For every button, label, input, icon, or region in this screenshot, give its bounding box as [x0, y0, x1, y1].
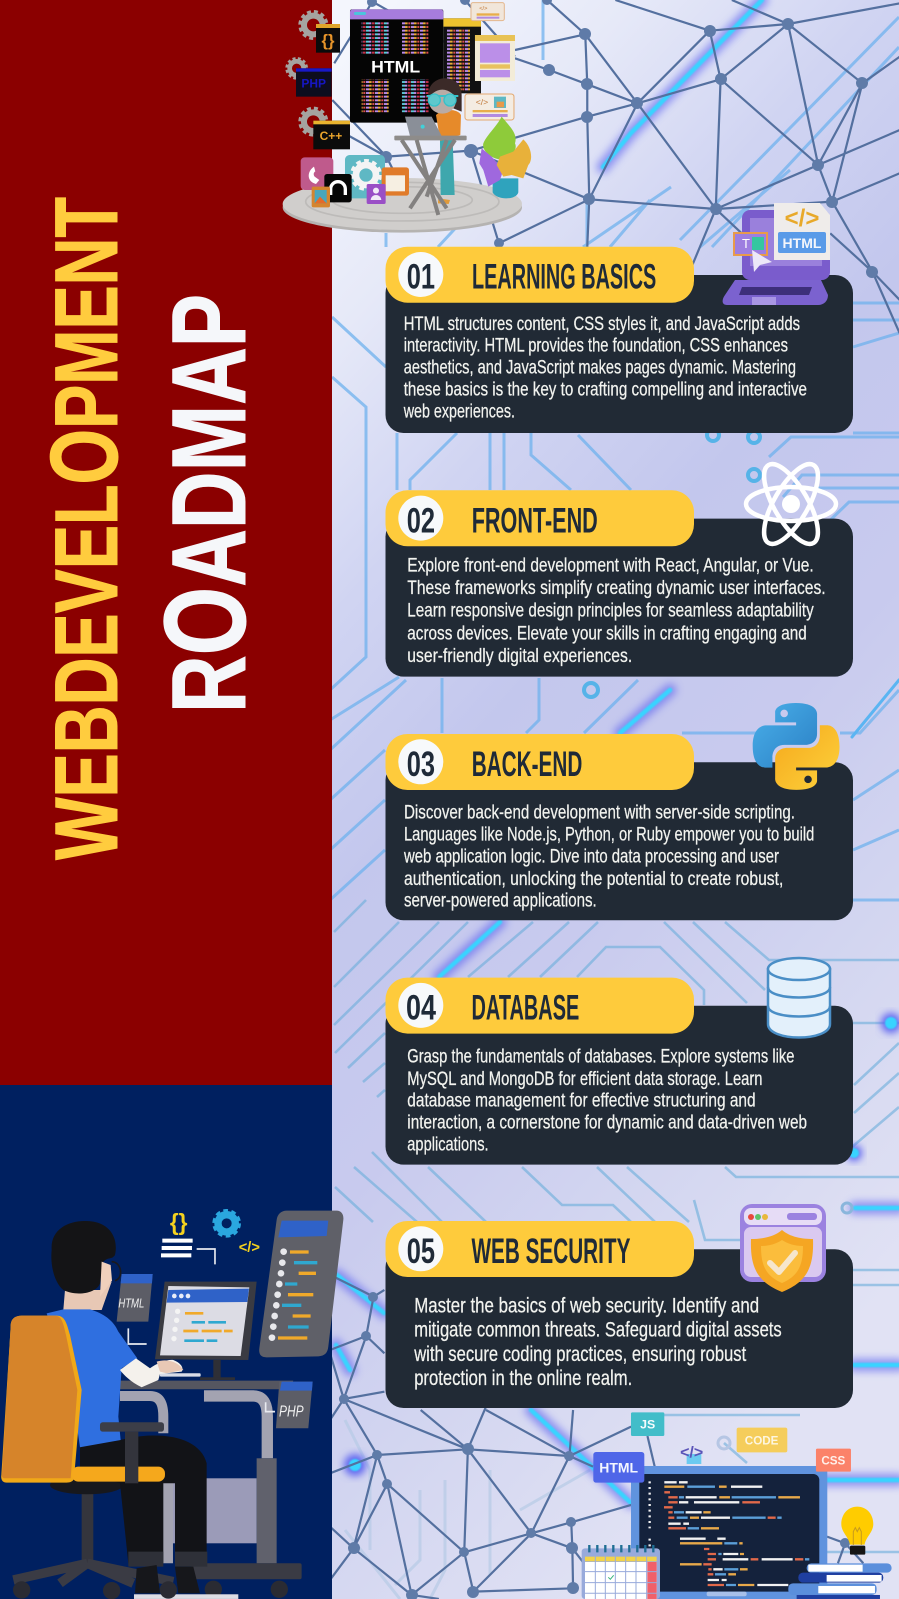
- body text: web application logic. Dive into data processing and user: [403, 847, 780, 868]
- main HTML panel: HTML: [371, 57, 420, 76]
- body text: web experiences.: [403, 401, 515, 422]
- body text: [403, 803, 814, 912]
- heading: WEB SECURITY: [472, 1232, 630, 1271]
- floating code symbols: {}: [170, 1209, 188, 1235]
- icon: html laptop: </>: [785, 205, 819, 232]
- plant: [479, 117, 531, 198]
- icon: database cylinder: [768, 958, 830, 1038]
- tile: PHP: [276, 1382, 313, 1428]
- icon: code brackets: </>: [680, 1444, 703, 1461]
- illustration: developer at standing desk with code panels: [283, 3, 531, 233]
- tile: PHP: PHP: [301, 77, 326, 91]
- body text: MySQL and MongoDB for efficient data storage. Learn: [407, 1069, 762, 1090]
- body text: [407, 556, 826, 667]
- chair: [1, 1316, 165, 1483]
- body text: mitigate common threats. Safeguard digital assets: [414, 1319, 782, 1342]
- side code panel: [443, 18, 481, 93]
- desk frame: [120, 1396, 302, 1599]
- desk and laptop: [394, 117, 467, 215]
- heading pill: [386, 978, 694, 1034]
- woman: [427, 78, 462, 204]
- icon: html laptop: [723, 203, 830, 305]
- card 2: front-end: [386, 490, 853, 677]
- body text: applications.: [407, 1135, 489, 1156]
- number badge: [398, 983, 443, 1028]
- body text: HTML structures content, CSS styles it, and JavaScript adds: [404, 314, 800, 335]
- chair base: [13, 1476, 177, 1599]
- body text: these basics is the key to crafting compelling and interactive: [404, 379, 807, 400]
- body text: [403, 314, 807, 422]
- tile: curly braces: {}: [322, 31, 335, 50]
- body text: interaction, a cornerstone for dynamic and data-driven web: [407, 1112, 807, 1133]
- card body: [386, 275, 853, 433]
- card 1: learning basics: [386, 247, 853, 433]
- tile: HTML: [117, 1274, 153, 1322]
- platter: [283, 178, 522, 233]
- title: roadmap: ROADMAP: [140, 294, 270, 713]
- glowing nodes and rings: [344, 429, 899, 1476]
- tag: CSS: CSS: [821, 1454, 846, 1467]
- tag: JS: JS: [640, 1418, 655, 1432]
- body text: Explore front-end development with React, Angular, or Vue.: [407, 556, 814, 577]
- icon: shield in browser window: [740, 1204, 826, 1292]
- icon: html laptop: T: [742, 236, 750, 251]
- neon streaks: [336, 0, 899, 1503]
- icon: books: [788, 1563, 892, 1599]
- monitor: [155, 1282, 257, 1380]
- small floating cards: </>: [476, 97, 488, 107]
- heading: FRONT-END: [472, 501, 598, 540]
- tile: curly braces: [316, 24, 340, 53]
- heading pill: [386, 734, 694, 790]
- tag: CODE: [737, 1428, 787, 1452]
- card body: [386, 762, 853, 920]
- card body: [386, 1006, 853, 1165]
- panel: red title panel: [0, 0, 332, 1085]
- body text: Grasp the fundamentals of databases. Explore systems like: [407, 1046, 794, 1067]
- number: 05: [407, 1232, 435, 1271]
- tag: CODE: CODE: [745, 1434, 779, 1447]
- faint traces, bottom left: [345, 1420, 590, 1599]
- floating code symbols: [128, 1209, 275, 1412]
- icon: react atom: [746, 457, 836, 551]
- body text: Master the basics of web security. Identify and: [414, 1294, 759, 1317]
- panel: navy illustration panel: [0, 1085, 332, 1599]
- number: 03: [407, 745, 435, 784]
- title: web development: WEBDEVELOPMENT: [31, 197, 138, 860]
- tag: HTML: [593, 1452, 644, 1483]
- small floating cards: [465, 3, 515, 120]
- number badge: [398, 496, 443, 541]
- body text: authentication, unlocking the potential to create robust,: [404, 869, 783, 890]
- tag: JS: [631, 1412, 664, 1436]
- number badge: [398, 1226, 443, 1271]
- laptop: [631, 1466, 827, 1599]
- network mesh: bottom: [330, 1277, 863, 1599]
- number badge: [398, 739, 443, 784]
- main HTML panel: [350, 9, 443, 123]
- icon: html laptop: HTML: [783, 235, 822, 251]
- heading: DATABASE: [472, 989, 579, 1028]
- tile: PHP: PHP: [279, 1404, 304, 1421]
- small floating cards: </>: [479, 6, 488, 12]
- card body: [386, 519, 853, 677]
- desk top: [116, 1381, 293, 1389]
- gears: [287, 12, 327, 135]
- icon: calendar: [582, 1545, 660, 1599]
- body text: protection in the online realm.: [414, 1367, 632, 1390]
- tile: C++: C++: [320, 129, 342, 143]
- tile: C++: [313, 121, 350, 149]
- tag: HTML: HTML: [599, 1459, 639, 1475]
- floating code symbols: </>: [239, 1240, 260, 1256]
- heading pill: [386, 1221, 694, 1277]
- card 3: back-end: [386, 734, 853, 920]
- man: [47, 1221, 207, 1593]
- icon: python logo: [753, 703, 840, 790]
- card 4: database: [386, 978, 853, 1165]
- pale circuit traces, lower half: [334, 900, 899, 1552]
- tile: HTML: HTML: [118, 1296, 144, 1311]
- body text: with secure coding practices, ensuring robust: [413, 1343, 746, 1366]
- page background: [332, 0, 899, 1599]
- body text: interactivity. HTML provides the foundation, CSS enhances: [404, 336, 788, 357]
- icon: light bulb: [841, 1507, 873, 1555]
- number: 04: [406, 989, 436, 1028]
- card 5: web security: [386, 1221, 853, 1408]
- illustration: developer seated at desk: [1, 1209, 343, 1599]
- body text: user-friendly digital experiences.: [407, 646, 632, 667]
- heading: LEARNING BASICS: [472, 258, 656, 297]
- tile: PHP: [296, 68, 332, 97]
- illustration: laptop with code, tags, calendar, bulb and books: [582, 1412, 892, 1599]
- body text: [407, 1046, 807, 1156]
- side code panel: [259, 1211, 343, 1357]
- body text: database management for effective structuring and: [407, 1091, 756, 1112]
- network mesh: top: [332, 0, 899, 333]
- tag: CSS: [816, 1449, 851, 1472]
- heading: BACK-END: [472, 745, 582, 784]
- body text: [413, 1294, 782, 1390]
- card body: [386, 1249, 853, 1408]
- code lines: [664, 1482, 809, 1585]
- number: 01: [407, 258, 435, 297]
- heading pill: [386, 247, 694, 303]
- heading pill: [386, 490, 694, 546]
- circuit board background lines: [330, 0, 899, 900]
- body text: Discover back-end development with server-side scripting.: [404, 803, 795, 824]
- body text: server-powered applications.: [404, 891, 597, 912]
- app tiles: [301, 155, 409, 207]
- body text: across devices. Elevate your skills in crafting engaging and: [407, 623, 807, 644]
- number: 02: [407, 501, 435, 540]
- number badge: [398, 252, 443, 297]
- body text: aesthetics, and JavaScript makes pages dynamic. Mastering: [404, 357, 796, 378]
